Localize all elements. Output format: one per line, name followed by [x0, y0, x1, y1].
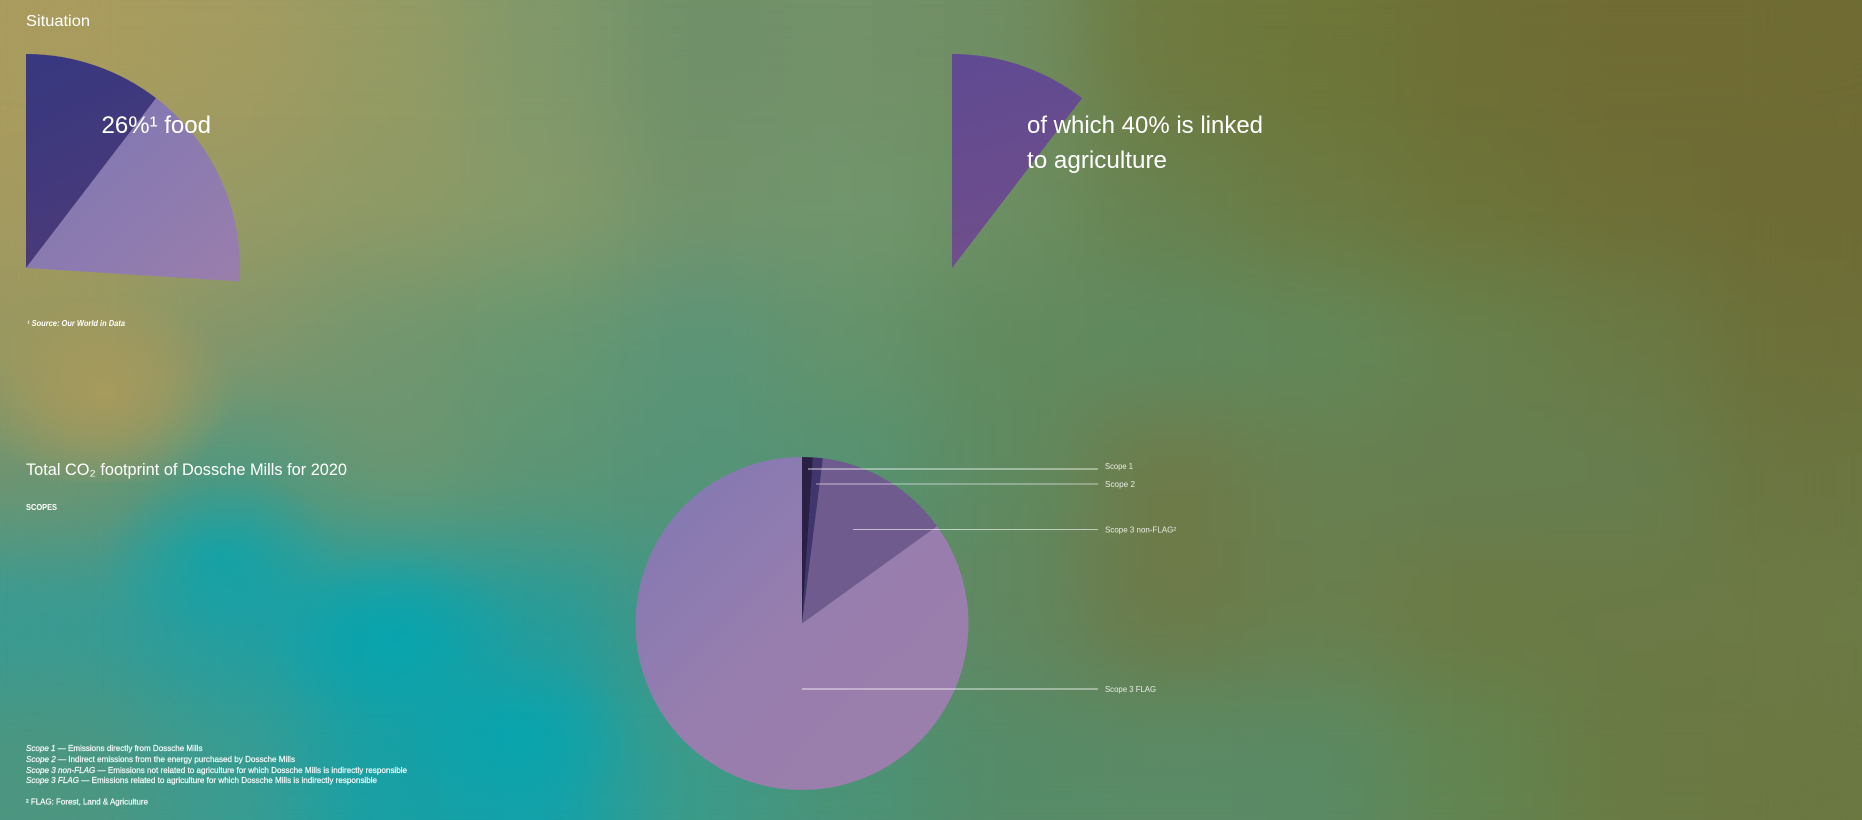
text: of which 40% is linked to agriculture: of which 40% is linked [1027, 112, 1263, 139]
footnote: FLAG definition: ² FLAG: Forest, Land & Agriculture [26, 796, 148, 806]
legend: scope definitions [26, 743, 407, 785]
slice: remaining food share [26, 98, 240, 281]
legend: scope definitions: Scope 3 FLAG — Emissions related to agriculture for which Dossche Mills is indirectly responsible [26, 775, 377, 785]
slice: scope 2 [802, 457, 823, 624]
slice: scope 3 FLAG [635, 457, 968, 790]
footnote: source: ¹ Source: Our World in Data [27, 319, 126, 328]
callout: scope 3 FLAG: Scope 3 FLAG [1105, 684, 1156, 694]
slice: scope 1 [802, 457, 813, 624]
heading: total CO2 footprint: Total CO₂ footprint of Dossche Mills for 2020 [26, 461, 347, 479]
heading: Situation: Situation [26, 13, 90, 30]
text: of which 40% is linked to agriculture [1027, 112, 1263, 174]
slice: agriculture-linked share of food [26, 54, 156, 268]
legend: scope definitions: Scope 3 non-FLAG — Emissions not related to agriculture for which Dossche Mills is indirectly responsible [26, 765, 407, 775]
slice: scope 3 non-FLAG [802, 458, 937, 624]
text: of which 40% is linked to agriculture: to agriculture [1027, 147, 1167, 174]
pie slice: agriculture share [952, 54, 1082, 268]
callout: scope 3 non-FLAG: Scope 3 non-FLAG² [1105, 524, 1176, 534]
callout: scope 2: Scope 2 [1105, 479, 1135, 489]
subheading: scopes: SCOPES [26, 503, 58, 512]
legend: scope definitions: Scope 2 — Indirect emissions from the energy purchased by Dossche Mills [26, 754, 295, 764]
pie label: 26% food: 26%¹ food [102, 112, 211, 139]
legend: scope definitions: Scope 1 — Emissions directly from Dossche Mills [26, 743, 203, 753]
pie chart: food share of emissions [26, 54, 240, 281]
callout: scope 1: Scope 1 [1105, 461, 1133, 471]
pie chart: scopes [635, 457, 968, 790]
